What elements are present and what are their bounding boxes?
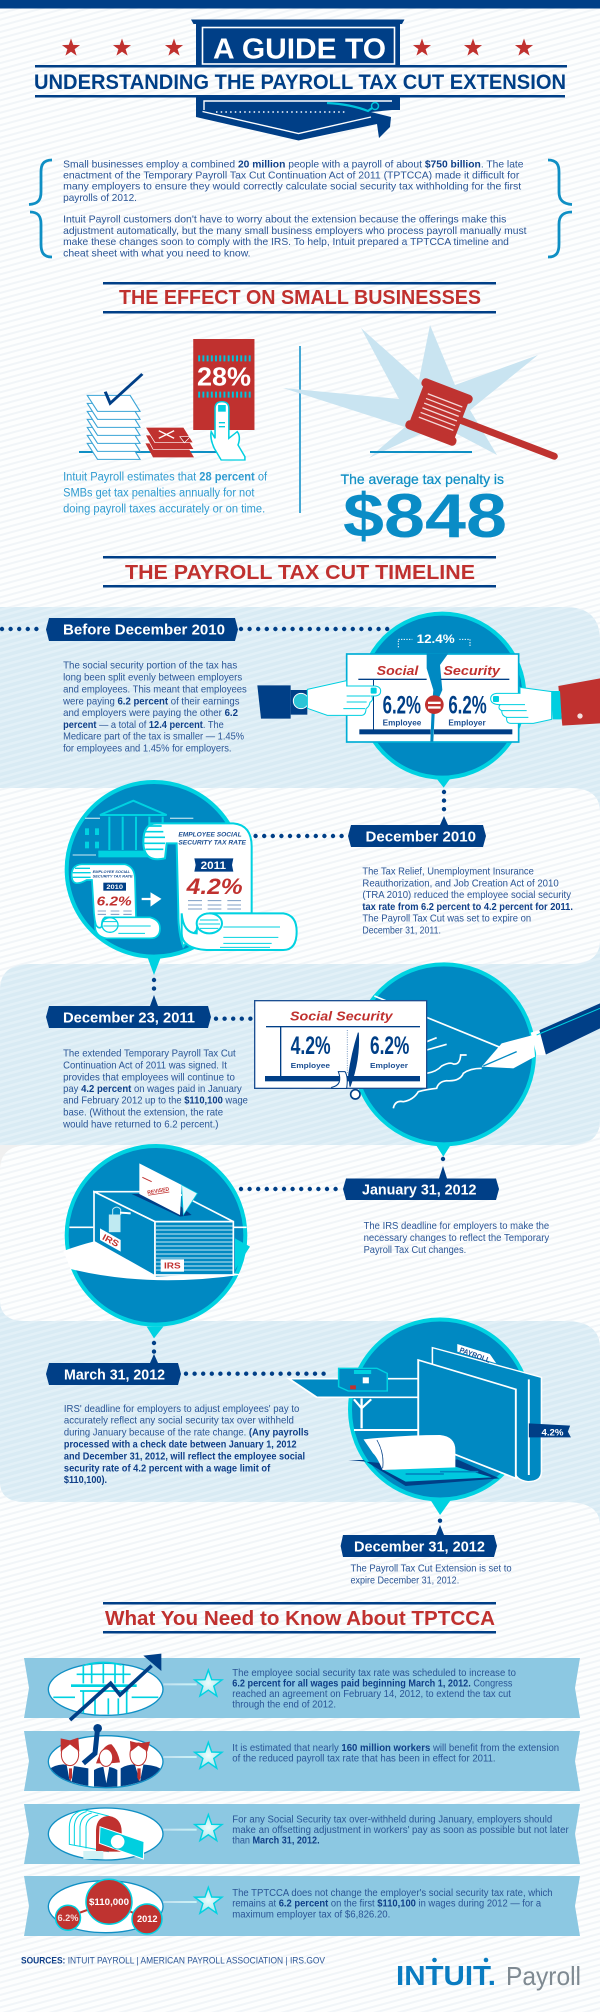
connector dots <box>154 1343 330 1374</box>
rule below subtitle <box>35 95 565 98</box>
icon: check mark <box>105 374 142 403</box>
small scroll heading 1: EMPLOYEE SOCIAL <box>93 870 131 874</box>
label: social: Social <box>377 663 419 678</box>
description: security rate of 4.2 percent with a wage limit of <box>64 1462 271 1474</box>
intro text: make these changes soon to comply with the IRS. To help, Intuit prepared a TPTCCA timeline and <box>63 236 509 248</box>
icon: ledger <box>348 1435 499 1486</box>
description: Medicare part of the tax is smaller — 1.45% <box>63 731 244 743</box>
timeline panels <box>0 607 600 1525</box>
description: provides that employees will continue to <box>63 1071 235 1083</box>
description: and February 2012 up to the $110,100 wage <box>63 1095 248 1107</box>
box slot <box>132 1194 192 1217</box>
intro braces <box>29 160 572 257</box>
ribbon: january 31, 2012 <box>343 1166 499 1200</box>
banner inner outline <box>202 28 394 64</box>
box left face <box>94 1192 155 1276</box>
back folder <box>432 1348 541 1482</box>
description: The Tax Relief, Unemployment Insurance <box>362 866 534 878</box>
description: expire December 31, 2012. <box>350 1574 459 1586</box>
icon: left hand with watch <box>257 681 381 719</box>
card: 28% <box>193 339 254 430</box>
circle <box>67 1146 245 1325</box>
pin tip <box>430 1500 451 1515</box>
fact text 2: of the reduced payroll tax rate that has been in effect for 2011. <box>232 1754 496 1765</box>
intro text: enactment of the Temporary Payroll Tax Cut Continuation Act of 2011 (TPTCCA) made it difficult for <box>63 170 520 182</box>
icon: paper stack <box>87 395 140 459</box>
white ground band <box>63 1242 243 1280</box>
description: Payroll Tax Cut changes. <box>364 1244 466 1256</box>
description: December 31, 2011. <box>362 925 441 937</box>
ribbon: march 31, 2012 <box>46 1354 181 1385</box>
description <box>62 1047 248 1131</box>
illustration: late filing stack and 28% card <box>79 339 254 460</box>
large scroll <box>143 823 297 950</box>
split document <box>347 654 519 742</box>
employer rate: 6.2% <box>370 1032 409 1060</box>
stat: $848: $848 <box>343 482 507 551</box>
intro text: payrolls of 2012. <box>63 192 137 204</box>
fact text 1: through the end of 2012. <box>232 1699 336 1710</box>
top bar <box>0 0 600 8</box>
description: The Payroll Tax Cut was set to expire on <box>362 913 531 925</box>
description: and employees. This meant that employees <box>63 683 247 695</box>
description <box>362 866 573 937</box>
icon: padlock <box>109 1207 131 1232</box>
employer label: Employer <box>448 718 486 727</box>
ribbon: december 31, 2012 <box>341 1525 497 1557</box>
icon: revised papers <box>139 1163 197 1215</box>
icon: money circles <box>48 1881 163 1933</box>
connector dots <box>154 980 254 1019</box>
fact icons <box>48 1654 163 1933</box>
icon: mailbox with cash <box>48 1808 163 1860</box>
employee rate: 4.2% <box>291 1032 331 1060</box>
box top <box>93 1192 233 1222</box>
illustration: pen signing and social security card <box>255 964 600 1157</box>
date label: January 31, 2012 <box>362 1182 476 1198</box>
description: would have returned to 6.2 percent.) <box>62 1119 218 1131</box>
description: $110,100). <box>64 1474 107 1486</box>
description: and employers were paying the other 6.2 <box>63 707 238 719</box>
irs label right: IRS <box>164 1261 181 1271</box>
employee rate: 6.2% <box>383 691 421 719</box>
description: The extended Temporary Payroll Tax Cut <box>63 1047 236 1059</box>
text: average tax penalty: The average tax penalty is <box>341 471 504 487</box>
shelf brackets <box>354 1398 419 1430</box>
icon: rejected red forms <box>145 427 194 457</box>
fact text 1: reached an agreement on February 14, 2012, to extend the tax cut <box>232 1689 511 1700</box>
social security card <box>255 1001 427 1088</box>
description <box>64 1403 309 1486</box>
icon: building with rising arrow <box>48 1654 163 1720</box>
ribbon label: 4.2% <box>542 1428 564 1438</box>
logo: intuit payroll <box>396 1958 581 1991</box>
bracket <box>398 639 470 647</box>
fact text 4 <box>232 1888 553 1920</box>
icon: hand holding card <box>211 402 245 460</box>
intro text: many employers to ensure they would correctly calculate social security tax withholding for the first <box>63 181 521 193</box>
description: (TRA 2010) reduced the employee social security <box>362 889 572 901</box>
scroll heading line 1: EMPLOYEE SOCIAL <box>178 832 242 839</box>
pin tip <box>435 1143 452 1157</box>
small rule lines <box>98 911 132 914</box>
description: accurately reflect any social security tax over withheld <box>64 1415 294 1427</box>
vertical divider <box>299 346 301 513</box>
scroll heading line 2: SECURITY TAX RATE <box>178 840 247 847</box>
description: base. (Without the extension, the rate <box>63 1107 223 1119</box>
description: percent — a total of 12.4 percent. The <box>63 719 224 731</box>
fact bands <box>24 1658 580 1936</box>
fact text 4: maximum employer tax of $6,826.20. <box>232 1909 390 1920</box>
date label: March 31, 2012 <box>64 1366 165 1384</box>
banner bottom chevron <box>196 96 400 140</box>
box right face <box>155 1222 233 1275</box>
arrow <box>142 894 159 904</box>
wordmark dots <box>432 1958 488 1962</box>
box stripes <box>156 1226 233 1270</box>
ribbon: 2011 <box>194 858 233 872</box>
pin tip <box>435 777 452 788</box>
card lines <box>265 1026 420 1081</box>
fact text 4: remains at 6.2 percent on the first $110,100 in wages during 2012 — for a <box>232 1899 542 1910</box>
small scroll <box>72 864 160 938</box>
heading: the payroll tax cut timeline: THE PAYROLL TAX CUT TIMELINE <box>125 562 475 584</box>
connector dots <box>247 792 444 836</box>
icon: right hand with sleeve <box>491 678 600 726</box>
year label: 2012 <box>137 1914 158 1925</box>
wage label: $110,000 <box>89 1897 129 1908</box>
fact text 3: than March 31, 2012. <box>232 1835 320 1846</box>
description: The Payroll Tax Cut Extension is set to <box>350 1563 512 1575</box>
description: Continuation Act of 2011 was signed. It <box>63 1059 227 1071</box>
front folder <box>418 1360 516 1478</box>
fact text 1 <box>232 1668 516 1710</box>
text: tax penalties estimate: Intuit Payroll estimates that 28 percent of <box>63 472 268 484</box>
chevron inner outline <box>202 101 392 134</box>
signature lines <box>374 996 500 1108</box>
employer label: Employer <box>370 1061 408 1070</box>
timeline item: december 31, 2012 <box>341 1518 512 1586</box>
illustration: irs drop box <box>63 1146 250 1338</box>
ribbon: 2010 <box>103 883 126 891</box>
intro text <box>63 158 527 259</box>
heading: a guide to: A GUIDE TO <box>213 34 386 66</box>
gavel <box>404 377 567 483</box>
fact text 2 <box>232 1743 559 1765</box>
description <box>62 660 247 755</box>
heading: understanding: UNDERSTANDING THE PAYROLL TAX CUT EXTENSION <box>34 70 566 94</box>
label panel right <box>161 1259 184 1272</box>
cut dotted line <box>216 111 346 113</box>
icon: scissors <box>327 102 378 111</box>
cyan wedge <box>235 1238 250 1270</box>
stat: 12.4%: 12.4% <box>417 632 455 646</box>
description: necessary changes to reflect the Temporary <box>364 1232 550 1244</box>
text: tax penalties estimate: SMBs get tax penalties annually for not <box>63 488 255 500</box>
timeline item: december 2010 <box>247 792 573 937</box>
description: processed with a check date between January 1, 2012 <box>64 1439 297 1451</box>
stat: 4.2%: 4.2% <box>186 874 243 899</box>
description: for employees and 1.45% for employers. <box>63 743 231 755</box>
icon: workers <box>48 1724 163 1788</box>
description: and December 31, 2012, will reflect the employee social <box>64 1450 305 1462</box>
icon: fountain pen <box>482 1003 600 1068</box>
ribbon: december 2010 <box>348 816 486 847</box>
ground line <box>370 451 472 453</box>
fact text 4: The TPTCCA does not change the employer's social security tax rate, which <box>232 1888 553 1899</box>
description: Reauthorization, and Job Creation Act of 2010 <box>362 877 559 889</box>
fact text 1: The employee social security tax rate was scheduled to increase to <box>232 1668 516 1679</box>
building <box>99 801 167 856</box>
shelf <box>289 1379 419 1397</box>
scroll rule lines <box>188 901 241 909</box>
payroll tab label: PAYROLL <box>458 1345 492 1365</box>
connector dots <box>2 627 390 631</box>
circle <box>354 964 534 1144</box>
payroll word: Payroll <box>506 1961 581 1991</box>
rule above subtitle <box>35 65 567 68</box>
description <box>350 1563 512 1586</box>
label panel left <box>100 1228 121 1252</box>
title banner <box>34 20 567 140</box>
panel corners <box>565 607 600 640</box>
icon: small lock box <box>339 1368 387 1391</box>
date label: December 2010 <box>366 828 476 846</box>
date label: Before December 2010 <box>63 622 225 638</box>
illustration: social security split <box>257 614 600 788</box>
intro text: adjustment automatically, but the many small business employers who process payroll manually must <box>63 225 527 237</box>
connector dot <box>438 1518 442 1523</box>
circle <box>67 782 241 957</box>
sources: SOURCES: INTUIT PAYROLL | AMERICAN PAYROLL ASSOCIATION | IRS.GOV <box>21 1955 325 1965</box>
ground line <box>79 451 230 453</box>
icon: scissors <box>332 1033 360 1099</box>
heading: what you need to know: What You Need to Know About TPTCCA <box>105 1608 495 1630</box>
description <box>364 1220 550 1256</box>
rate label: 6.2% <box>58 1913 78 1923</box>
ribbon: before december 2010 <box>46 618 238 641</box>
ribbon: december 23, 2011 <box>46 995 211 1028</box>
description: IRS' deadline for employers to adjust employees' pay to <box>64 1403 299 1415</box>
table lines <box>358 679 512 734</box>
horizon line <box>69 1225 247 1230</box>
circle <box>350 1320 530 1500</box>
timeline item: december 23, 2011 <box>46 980 254 1131</box>
illustration: tax rate scrolls <box>67 782 297 975</box>
card title: Social Security <box>290 1010 394 1024</box>
cut line <box>346 1030 349 1073</box>
icon: gavel with burst <box>283 325 567 483</box>
pin tip <box>147 955 162 975</box>
intro text: Intuit Payroll customers don't have to worry about the extension because the offerings make this <box>63 214 506 226</box>
fact stars and connectors <box>163 1670 222 1913</box>
fact text 1: 6.2 percent for all wages paid beginning March 1, 2012. Congress <box>232 1678 512 1689</box>
ribbon: 4.2% <box>529 1423 571 1437</box>
timeline item: march 31, 2012 <box>46 1343 330 1486</box>
description: The IRS deadline for employers to make the <box>364 1220 549 1232</box>
label: security: Security <box>443 663 501 678</box>
description: pay 4.2 percent on wages paid in January <box>63 1083 242 1095</box>
text: tax penalties estimate <box>63 472 268 516</box>
fact text 3 <box>232 1814 569 1846</box>
date label: December 31, 2012 <box>354 1538 485 1556</box>
document tear <box>427 653 448 742</box>
burst <box>283 325 538 458</box>
building windows <box>85 828 99 848</box>
employee label: Employee <box>291 1061 330 1070</box>
intro text: Small businesses employ a combined 20 million people with a payroll of about $750 billion. The late <box>63 158 524 170</box>
text: tax penalties estimate: doing payroll taxes accurately or on time. <box>63 504 265 516</box>
timeline item: before december 2010 <box>2 618 390 755</box>
card label: 28% <box>197 362 251 392</box>
illustration: payroll folders and ledger <box>289 1320 571 1515</box>
intuit wordmark: INTUIT. <box>396 1960 496 1991</box>
banner top shield <box>191 20 404 66</box>
description: during January because of the rate change. (Any payrolls <box>64 1427 309 1439</box>
timeline item: january 31, 2012 <box>241 1159 550 1256</box>
year label: 2011 <box>201 860 226 872</box>
icon: equals <box>425 695 444 714</box>
stars left and right <box>62 38 533 56</box>
irs label left: IRS <box>101 1232 121 1249</box>
employer rate: 6.2% <box>448 691 487 719</box>
date label: December 23, 2011 <box>63 1010 195 1026</box>
small year label: 2010 <box>106 884 123 891</box>
card hatching <box>198 358 253 395</box>
skyline lines <box>73 818 193 855</box>
employee label: Employee <box>383 718 422 727</box>
fact text 3: make an offsetting adjustment in workers' pay as soon as possible but not later <box>232 1825 569 1836</box>
heading: the effect on small businesses: THE EFFECT ON SMALL BUSINESSES <box>119 287 481 309</box>
pin tip <box>147 1327 163 1338</box>
small stat: 6.2%: 6.2% <box>97 893 132 908</box>
fact text 3: For any Social Security tax over-withheld during January, employers should <box>232 1814 552 1825</box>
revised stamp: REVISED <box>147 1187 170 1196</box>
icon: wage base circles <box>56 1879 162 1934</box>
small scroll heading 2: SECURITY TAX RATE <box>93 875 133 879</box>
intro text: cheat sheet with what you need to know. <box>63 247 251 259</box>
folder tab <box>457 1344 496 1363</box>
description: The social security portion of the tax has <box>63 660 237 672</box>
description: were paying 6.2 percent of their earnings <box>62 695 240 707</box>
fact text 2: It is estimated that nearly 160 million workers will benefit from the extension <box>232 1743 559 1754</box>
circle <box>360 614 524 778</box>
connector dots <box>241 1159 443 1189</box>
description: long been split evenly between employers <box>63 672 242 684</box>
description: tax rate from 6.2 percent to 4.2 percent for 2011. <box>362 901 573 913</box>
